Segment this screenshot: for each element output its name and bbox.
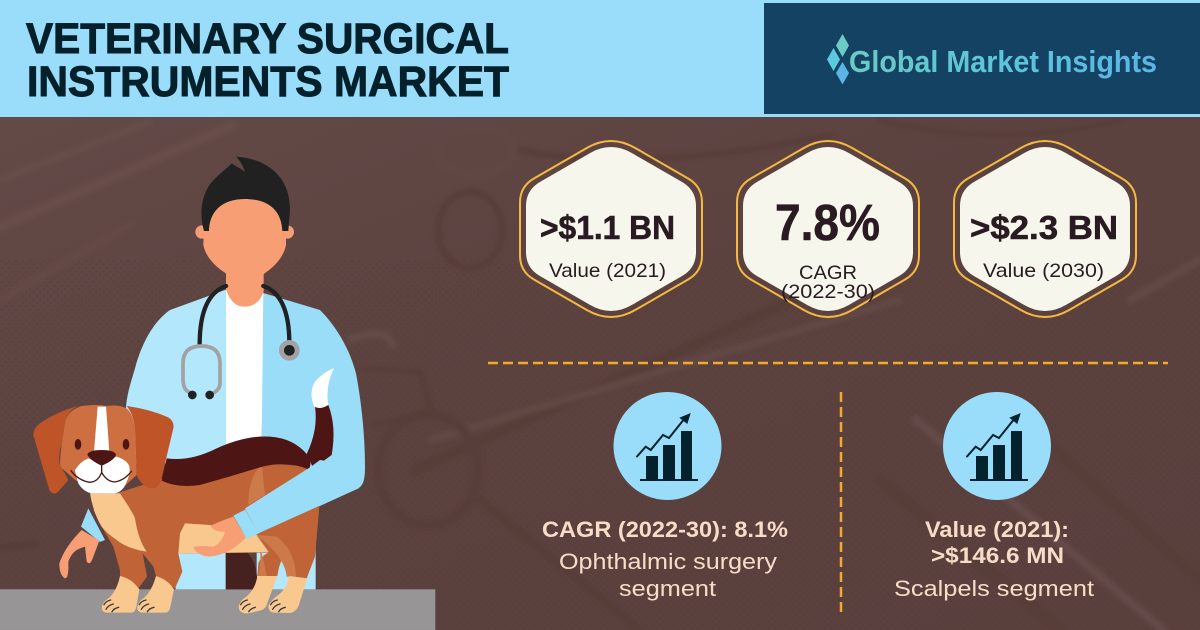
text: ophthalmic segment (542, 517, 788, 601)
trousers (226, 553, 257, 589)
dog paws (102, 576, 307, 613)
text: ophthalmic segment: segment (619, 576, 716, 601)
hexagon stat: CAGR: 7.8% (775, 194, 880, 251)
hexagon stat: value 2030: Value (2030) (983, 260, 1104, 282)
icon: growth chart, scalpels (943, 392, 1051, 500)
text: scalpels segment: >$146.6 MN (931, 543, 1064, 568)
hexagon stat: value 2021 (520, 141, 702, 317)
hexagon stat: value 2030 (954, 141, 1136, 317)
far arm cuff (81, 508, 105, 542)
hexagon stat: value 2021: Value (2021) (549, 260, 666, 282)
near arm sleeve (245, 460, 364, 533)
coat left (126, 289, 227, 463)
dog chest (90, 493, 147, 552)
dog claws (104, 600, 285, 612)
dog tail (307, 405, 334, 468)
dog muzzle (75, 457, 130, 493)
shirt (226, 288, 263, 450)
title: INSTRUMENTS MARKET (27, 59, 509, 106)
dog head (60, 405, 137, 493)
hexagon stat: CAGR: (2022-30) (781, 281, 875, 303)
text: scalpels segment: Value (2021): (925, 517, 1069, 542)
hexagon stat: value 2030: >$2.3 BN (970, 209, 1118, 246)
hexagon stat: CAGR (737, 141, 919, 317)
dog blaze (94, 407, 109, 452)
illustration: vet with dog (0, 157, 435, 630)
far hand (59, 530, 99, 578)
hexagon stat: CAGR: CAGR (799, 262, 857, 284)
neck and head (226, 263, 264, 307)
header band (0, 0, 1200, 117)
text: scalpels segment (894, 517, 1094, 601)
logo: Global Market Insights (764, 3, 1200, 114)
title (26, 16, 509, 106)
dog saddle (162, 436, 310, 486)
vet figure (126, 157, 365, 589)
title: VETERINARY SURGICAL (26, 16, 509, 63)
dog belly (178, 523, 269, 553)
icon: logo diamonds (827, 34, 849, 84)
vet arms (59, 460, 364, 578)
near hand (193, 517, 246, 557)
dog hip patch (248, 465, 265, 505)
stethoscope (183, 286, 289, 395)
coat lower (167, 463, 226, 589)
hair (201, 157, 290, 231)
text: scalpels segment: Scalpels segment (894, 576, 1094, 601)
hexagon stat: value 2021: >$1.1 BN (540, 209, 675, 246)
text: ophthalmic segment: CAGR (2022-30): 8.1% (542, 517, 788, 542)
icon: growth chart, ophthalmic (614, 392, 722, 500)
dog (33, 368, 334, 613)
dog body and legs (93, 463, 319, 588)
logo wordmark: Global Market Insights (849, 44, 1157, 79)
coat right (243, 293, 365, 535)
dog ears (33, 406, 78, 493)
table (0, 589, 435, 630)
text: ophthalmic segment: Ophthalmic surgery (559, 549, 777, 574)
dog eyes and nose (75, 439, 81, 450)
